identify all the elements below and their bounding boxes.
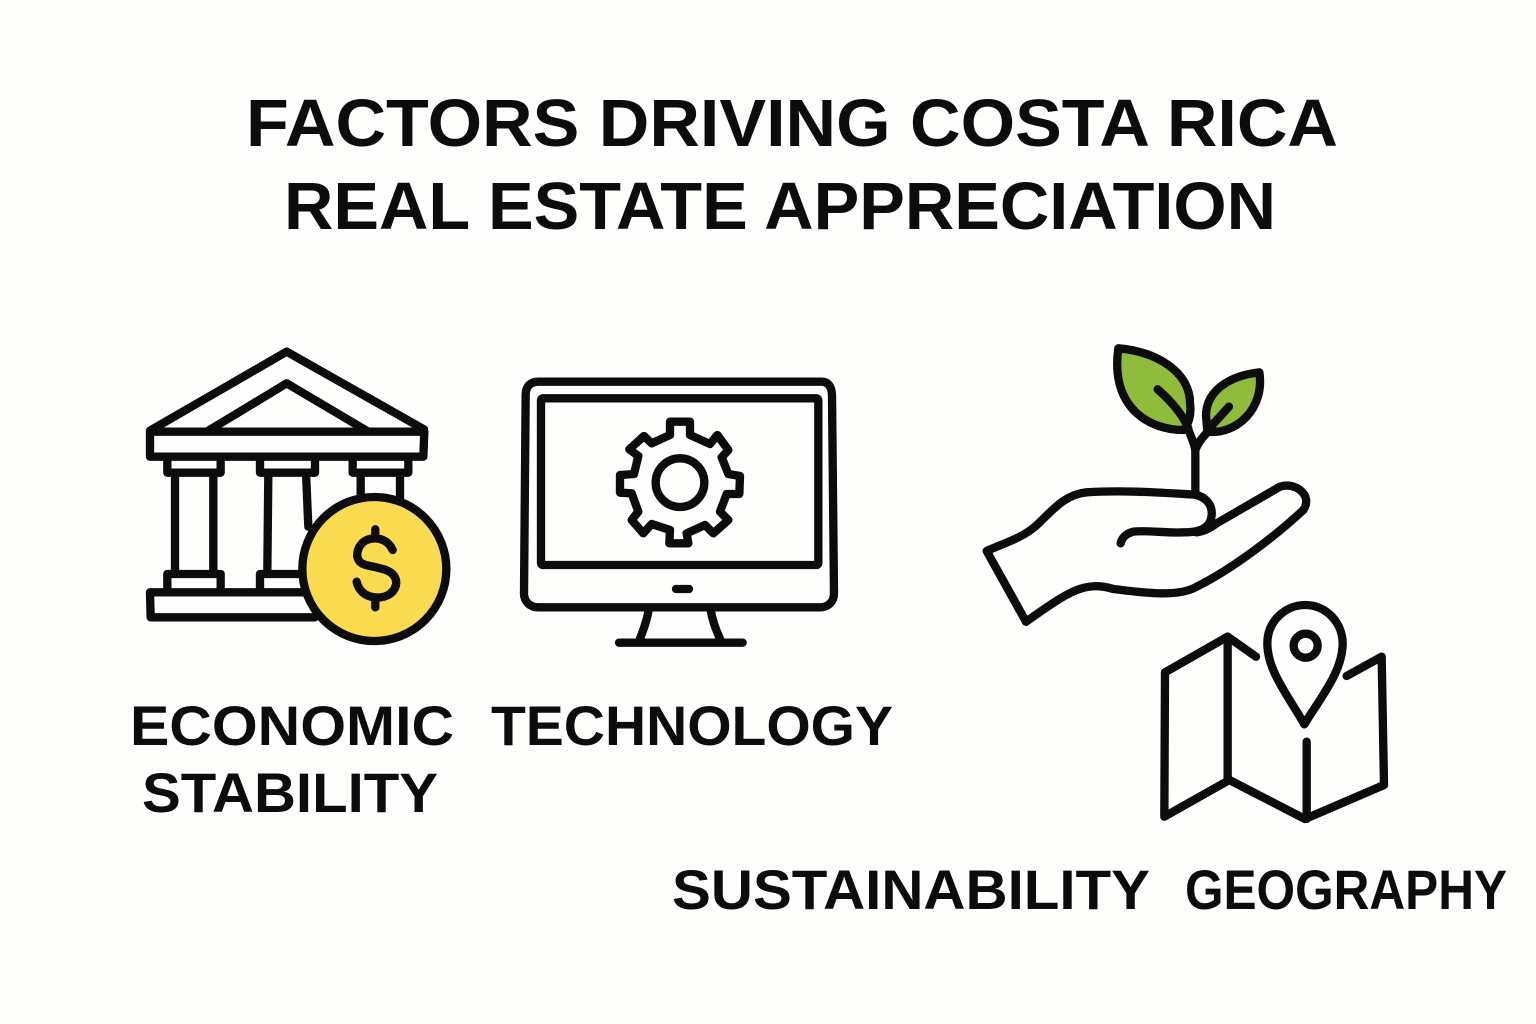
icon: coin xyxy=(302,497,446,641)
icon: map with pin xyxy=(1164,605,1384,819)
title: FACTORS DRIVING COSTA RICA xyxy=(246,86,1338,161)
label: sustainability: SUSTAINABILITY xyxy=(672,858,1150,921)
title xyxy=(246,86,1338,244)
icon: left leaf xyxy=(1117,348,1190,430)
icon: hand holding sprout xyxy=(987,348,1306,622)
icon: pin xyxy=(1267,605,1343,724)
icon: right leaf xyxy=(1206,372,1260,432)
label: technology: TECHNOLOGY xyxy=(491,694,893,757)
label: economic stability: ECONOMIC xyxy=(130,694,454,757)
icon: bank with dollar coin xyxy=(150,352,446,641)
icon: gear xyxy=(620,422,740,543)
title: REAL ESTATE APPRECIATION xyxy=(284,169,1276,244)
label: economic stability: STABILITY xyxy=(142,761,438,824)
label: economic stability xyxy=(130,694,454,824)
icon: monitor with gear xyxy=(524,382,834,643)
